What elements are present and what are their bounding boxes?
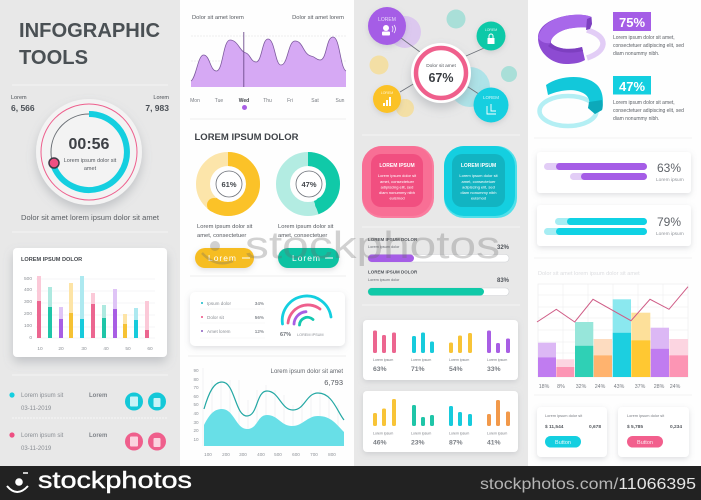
panel: mini bars bottom: 46% — [373, 440, 387, 446]
left stat: 6,566 — [11, 95, 35, 113]
axis labels: 500 — [24, 276, 32, 282]
list row: pink: Lorem ipsum sit — [21, 433, 64, 439]
axis labels: 60 — [147, 346, 153, 352]
node: yellow chart — [373, 85, 401, 113]
card: cyan — [444, 146, 517, 218]
legend: 56% — [255, 315, 264, 320]
line and area chart: 500 — [274, 452, 282, 457]
card: pink button: 0,234 — [670, 424, 682, 430]
axis labels: 200 — [24, 311, 32, 317]
3D ring: cyan — [540, 77, 603, 126]
card: pink: adipiscing elit, sed — [381, 184, 413, 190]
donut: 61%: 61% — [221, 180, 237, 189]
panel: bar chart card — [13, 248, 167, 357]
button: yellow — [195, 248, 254, 268]
left stat: 6,566: 6, 566 — [11, 103, 35, 113]
right stat: 7,983 — [145, 95, 169, 113]
panel: mini bars bottom: 23% — [411, 440, 425, 446]
axis labels: 40 — [103, 346, 109, 352]
network diagram — [368, 7, 517, 122]
area chart: weekly: Tue — [215, 98, 223, 104]
hub: 67% — [411, 43, 471, 103]
legend: Dolor sit — [207, 315, 225, 320]
progress: 32%: Lorem ipsum dolor — [368, 245, 400, 249]
title: TOOLS — [19, 47, 88, 69]
stacked bars — [37, 276, 149, 338]
area chart: weekly: Sun — [336, 98, 345, 104]
stacked columns — [538, 299, 688, 377]
panel: purple bars — [537, 152, 691, 193]
list row: cyan: 03-11-2019 — [21, 406, 52, 412]
area chart: weekly: Dolor sit amet lorem — [292, 15, 344, 21]
stat: 75%: 75% — [619, 15, 645, 30]
panel: purple bars: 63% — [657, 161, 681, 175]
axis labels: 0 — [29, 335, 32, 341]
footer logo: stockphotos — [38, 467, 192, 493]
icon: document — [125, 392, 143, 410]
area chart: weekly: Wed — [239, 98, 249, 104]
line and area chart: 700 — [310, 452, 318, 457]
card: cyan button: Lorem ipsum dolor sit — [545, 413, 583, 418]
hub: 67%: Dolor sit amet — [426, 63, 456, 69]
axis labels: 50 — [125, 346, 131, 352]
title: INFOGRAPHIC — [19, 20, 160, 42]
card: cyan: diam nonummy nibh — [460, 190, 497, 195]
list row: cyan: Lorem ipsum sit — [21, 393, 64, 399]
axis labels: 10 — [37, 346, 43, 352]
stat: 47%: consectetuer adipiscing elit, sed — [613, 108, 684, 114]
progress: 32%: LOREM IPSUM DOLOR — [368, 237, 418, 242]
panel: cyan bars: 79% — [657, 215, 681, 229]
rainbow arcs — [282, 296, 331, 325]
panel: mini bars top: 71% — [411, 366, 425, 373]
column labels: 32% — [576, 384, 587, 390]
icon: trash — [148, 432, 166, 450]
area chart: weekly: Mon — [190, 98, 200, 104]
axis labels: 100 — [24, 323, 32, 329]
stat: 75% — [613, 12, 684, 57]
progress: 83%: Lorem ipsum dolor — [368, 278, 400, 282]
stat: 47% — [613, 76, 684, 122]
card: cyan button: $ 11,544 — [545, 424, 564, 430]
legend: Ipsum dolor — [207, 301, 231, 306]
panel: legend and rainbow arcs: 67% — [280, 332, 291, 338]
list row: pink: Lorem — [89, 433, 107, 439]
card: cyan button — [537, 407, 607, 457]
axis labels — [24, 276, 153, 352]
timer gauge — [36, 99, 142, 205]
icon: document — [125, 432, 143, 450]
stat: 47%: diam nonummy nibh. — [613, 116, 659, 122]
area chart: weekly: Fri — [287, 98, 293, 104]
card: cyan: amet, consectetuer — [461, 179, 496, 184]
list row: pink: 03-11-2019 — [21, 446, 52, 452]
donut: 61% — [197, 159, 253, 239]
donut: 47%: amet, consectetuer — [278, 233, 327, 239]
panel: mini bars bottom: Lorem ipsum — [449, 432, 469, 436]
3D ring: purple — [538, 15, 603, 64]
left stat: 6,566: Lorem — [11, 95, 27, 101]
stat: 75%: consectetuer adipiscing elit, sed — [613, 43, 684, 49]
card: pink: diam nonummy nibh — [379, 190, 415, 195]
line and area chart — [193, 368, 344, 457]
node: cyan — [474, 88, 508, 122]
timer gauge: amet — [84, 166, 97, 172]
card: pink button: Lorem ipsum dolor sit — [627, 413, 665, 418]
panel: mini bars top: Lorem ipsum — [373, 358, 393, 362]
column labels — [539, 384, 681, 390]
card heading: LOREM IPSUM DOLOR — [21, 257, 82, 263]
panel: mini bars top: Lorem ipsum — [487, 358, 507, 362]
line and area chart: 300 — [239, 452, 247, 457]
axis labels: 30 — [81, 346, 87, 352]
timer caption: Dolor sit amet lorem ipsum dolor sit amet — [21, 215, 159, 222]
card: cyan: Lorem ipsum dolor sit — [459, 173, 498, 178]
panel: mini bars bottom: Lorem ipsum — [411, 432, 431, 436]
card: cyan: LOREM IPSUM — [461, 163, 496, 169]
heading: lorem ipsum dolor: LOREM IPSUM DOLOR — [194, 132, 299, 142]
watermark — [202, 225, 500, 267]
card: cyan button: 0,678 — [589, 424, 601, 430]
column labels: 18% — [539, 384, 550, 390]
line and area chart: 6,793 — [324, 378, 343, 387]
footer id: stockphotos.com/ 11066395 — [480, 476, 696, 493]
line and area chart: 40 — [193, 411, 199, 416]
area chart: weekly: Thu — [263, 98, 272, 104]
card: cyan: adipiscing elit, sed — [462, 184, 495, 190]
progress: 83%: 83% — [497, 278, 510, 284]
footer bar — [0, 466, 701, 500]
stat: 47%: Lorem ipsum dolor sit amet, — [613, 100, 675, 106]
node: purple: LOREM — [378, 17, 396, 23]
donut: 61%: amet, consectetuer — [197, 233, 246, 239]
donut: 47% — [278, 159, 334, 239]
line and area chart: 80 — [193, 377, 199, 382]
panel: cyan bars — [537, 205, 691, 246]
donut: 47%: 47% — [301, 180, 317, 189]
button: teal: Lorem — [292, 253, 320, 263]
title — [19, 20, 160, 69]
panel: mini bars top: 54% — [449, 366, 463, 373]
panel: mini bars bottom: Lorem ipsum — [373, 432, 393, 436]
node: purple — [368, 7, 406, 45]
line and area chart: 100 — [204, 452, 212, 457]
axis labels: 20 — [58, 346, 64, 352]
donut: 47%: Lorem ipsum dolor sit — [278, 224, 334, 230]
column labels: 43% — [614, 384, 625, 390]
line and area chart: Lorem ipsum dolor sit amet — [271, 369, 343, 375]
button: Button — [555, 440, 571, 446]
panel: mini bars bottom — [363, 391, 518, 452]
list row: pink — [9, 432, 166, 452]
footer logo — [7, 467, 192, 493]
line and area chart: 600 — [292, 452, 300, 457]
card: pink: Lorem ipsum dolor sit — [378, 173, 417, 178]
timer gauge: 00:56 — [69, 136, 110, 153]
card: pink: LOREM IPSUM — [379, 163, 415, 169]
stat: 75%: diam nonummy nibh. — [613, 51, 659, 57]
node: teal lock — [476, 22, 506, 50]
legend: 12% — [255, 329, 264, 334]
button: teal — [278, 248, 339, 268]
card: pink button — [618, 407, 689, 457]
column labels: 8% — [557, 384, 565, 390]
column labels: 28% — [654, 384, 665, 390]
line and area chart: 800 — [328, 452, 336, 457]
panel: mini bars bottom: Lorem ipsum — [487, 432, 507, 436]
timer gauge: Lorem ipsum dolor sit — [64, 158, 117, 164]
axis labels: 300 — [24, 299, 32, 305]
right stat: 7,983: 7, 983 — [145, 103, 169, 113]
panel: legend and rainbow arcs: LOREM IPSUM — [297, 333, 324, 337]
panel: cyan bars: Lorem ipsum — [656, 231, 684, 237]
line and area chart: 20 — [193, 428, 199, 433]
list row: cyan: Lorem — [89, 393, 107, 399]
line and area chart: 60 — [193, 394, 199, 399]
panel: mini bars top: Lorem ipsum — [449, 358, 469, 362]
card: pink — [362, 146, 434, 218]
stat: 75%: Lorem ipsum dolor sit amet, — [613, 35, 675, 41]
node: yellow chart: LOREM — [381, 91, 393, 95]
legend: Amet lorem — [207, 329, 231, 334]
panel: mini bars bottom: 41% — [487, 440, 501, 446]
donut: 61%: Lorem ipsum dolor sit — [197, 224, 253, 230]
column labels: 37% — [635, 384, 646, 390]
column labels: 24% — [595, 384, 606, 390]
area chart: weekly: Sat — [311, 98, 319, 104]
axis labels: 400 — [24, 287, 32, 293]
line and area chart: 10 — [193, 437, 199, 442]
line and area chart: 400 — [257, 452, 265, 457]
card: pink: euismod — [389, 196, 405, 200]
watermark: stockphotos — [245, 225, 500, 267]
card: pink: amet, consectetuer — [380, 179, 415, 184]
button: Button — [637, 440, 653, 446]
node: teal lock: LOREM — [485, 28, 497, 32]
panel: mini bars top: 63% — [373, 366, 387, 373]
area chart: weekly — [190, 15, 346, 110]
panel: mini bars top — [363, 320, 518, 380]
progress: 32%: 32% — [497, 245, 510, 251]
progress: 83%: LOREM IPSUM DOLOR — [368, 270, 418, 274]
trend line — [537, 287, 688, 322]
panel: legend and rainbow arcs — [190, 292, 345, 346]
panel: mini bars top: Lorem ipsum — [411, 358, 431, 362]
legend: 34% — [255, 301, 264, 306]
card: cyan: euismod — [471, 196, 486, 200]
line and area chart: 90 — [193, 368, 199, 373]
area chart: weekly: Dolor sit amet lorem — [192, 15, 244, 21]
column labels: 24% — [670, 384, 681, 390]
line and area chart: 200 — [222, 452, 230, 457]
progress: 83% — [368, 270, 510, 296]
button: yellow: Lorem — [208, 253, 236, 263]
combo chart — [537, 271, 688, 390]
stat: 47%: 47% — [619, 79, 645, 94]
progress: 32% — [368, 237, 510, 262]
line and area chart: 50 — [193, 402, 199, 407]
node: cyan: LOREM — [483, 95, 499, 100]
panel: mini bars top: 33% — [487, 366, 501, 373]
line and area chart: 30 — [193, 420, 199, 425]
list row: cyan — [9, 392, 166, 412]
line and area chart: 70 — [193, 385, 199, 390]
card: pink button: $ 5,785 — [627, 424, 643, 430]
hub: 67%: 67% — [428, 71, 454, 85]
panel: purple bars: Lorem ipsum — [656, 177, 684, 183]
chart caption: Dolor sit amet lorem ipsum dolor sit amet — [538, 271, 640, 277]
panel: mini bars bottom: 87% — [449, 440, 463, 446]
right stat: 7,983: Lorem — [153, 95, 169, 101]
icon: trash — [148, 392, 166, 410]
legend — [201, 301, 264, 334]
